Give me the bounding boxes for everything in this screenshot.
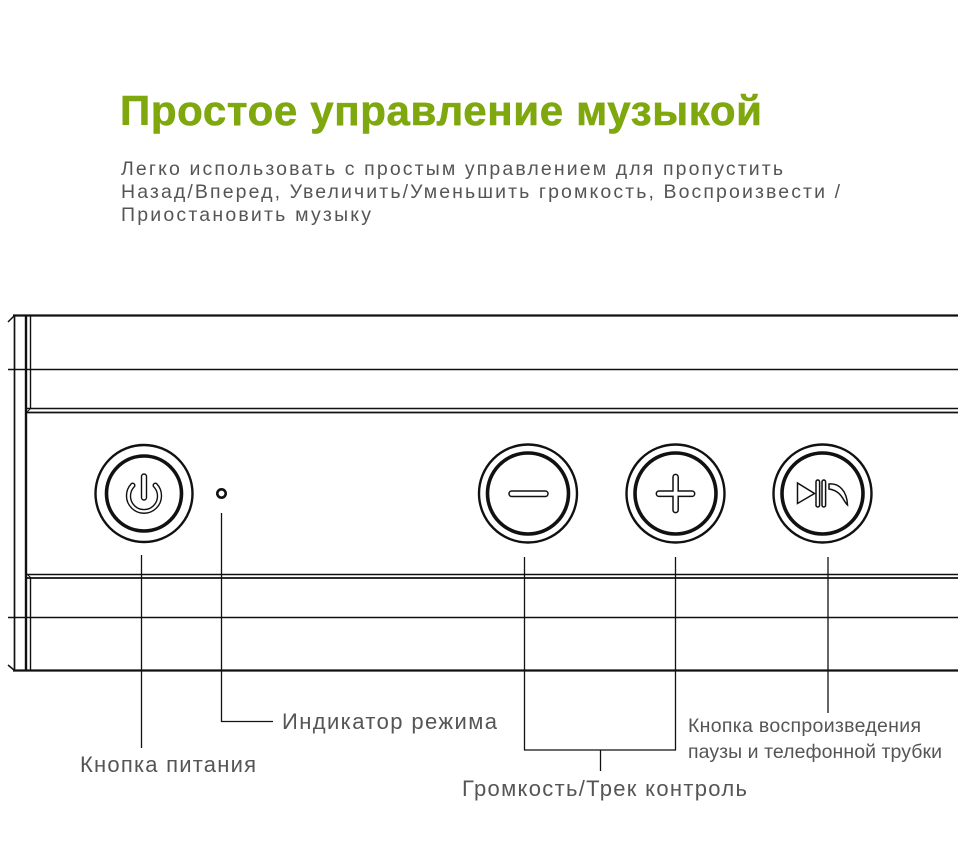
label: power button: Кнопка питания [80,752,256,777]
plus button [626,444,724,542]
icon: plus [656,474,695,513]
description text [121,158,841,226]
title: Простое управление музыкой [120,87,762,134]
power button [96,445,192,542]
description text: Приостановить музыку [121,204,371,226]
play pause button [774,444,872,542]
description text: Легко использовать с простым управлением для пропустить [121,158,783,180]
label: play pause and phone button [688,715,942,763]
label: volume track control: Громкость/Трек контроль [462,776,747,801]
label: mode indicator: Индикатор режима [282,709,498,734]
icon: minus [509,491,548,496]
icon: play pause phone [798,480,848,507]
icon: power [126,474,161,513]
description text: Назад/Вперед, Увеличить/Уменьшить громкость, Воспроизвести / [121,181,841,203]
label: play pause and phone button: паузы и телефонной трубки [688,741,942,763]
device body outline [8,316,958,670]
label: play pause and phone button: Кнопка воспроизведения [688,715,921,737]
minus button [479,444,577,542]
mode indicator [217,489,226,498]
leader lines [142,513,828,771]
